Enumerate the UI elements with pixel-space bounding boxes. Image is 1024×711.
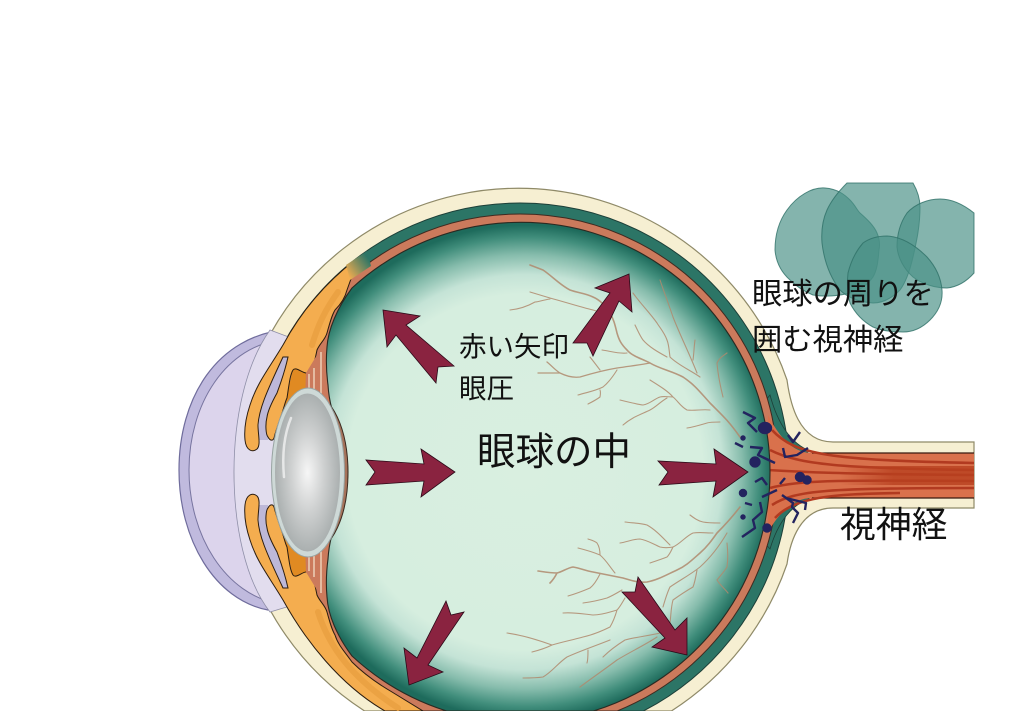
label: red arrows: 赤い矢印	[459, 331, 569, 362]
optic disc damage marks	[735, 412, 812, 537]
arrow: lower right	[622, 577, 687, 655]
eyeball illustration	[179, 183, 974, 711]
floating teal blobs	[775, 183, 974, 332]
arrow: right	[658, 449, 748, 497]
choroid ring	[251, 203, 789, 711]
arrow: upper right	[573, 274, 632, 356]
arrow: lower left	[404, 601, 464, 685]
retinal blood vessels	[507, 265, 740, 687]
chamber channels	[258, 356, 288, 589]
label: intraocular pressure: 眼圧	[459, 373, 514, 404]
sclera and optic nerve sheath	[234, 188, 974, 711]
retina ring	[262, 214, 778, 711]
orange shading bands	[312, 292, 398, 708]
arrow: centre	[366, 449, 455, 497]
choroid flare at nerve	[762, 395, 810, 549]
arrow: upper left	[383, 310, 454, 383]
iris and ciliary body, lower	[245, 494, 423, 711]
vitreous interior	[326, 222, 770, 711]
label: optic nerve: 視神経	[840, 505, 947, 545]
label: surrounding optic nerve	[752, 277, 934, 357]
label: surrounding optic nerve: 眼球の周りを	[752, 277, 934, 311]
anterior chamber overlay	[234, 330, 310, 612]
label: inside of eyeball: 眼球の中	[477, 431, 631, 474]
ciliary stripes	[305, 345, 338, 600]
iris and ciliary body, upper	[245, 260, 355, 451]
dark orange pockets	[284, 368, 307, 577]
orange to teal blend	[346, 251, 371, 280]
optic nerve	[768, 415, 974, 532]
label: surrounding optic nerve: 囲む視神経	[752, 323, 903, 357]
cornea	[179, 329, 300, 610]
lens	[272, 388, 348, 557]
